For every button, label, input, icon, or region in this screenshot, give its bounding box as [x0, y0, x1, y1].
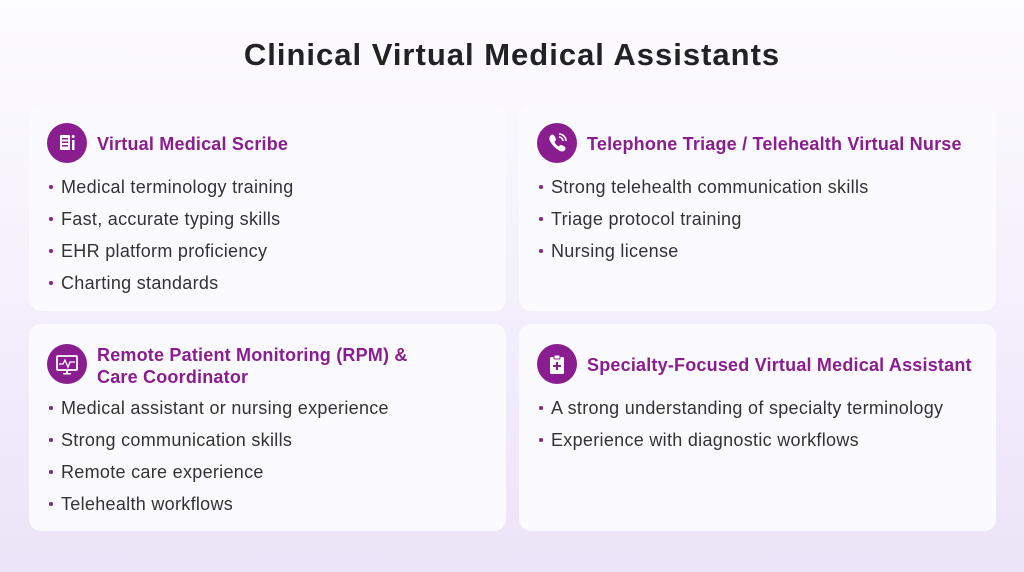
heading: Specialty-Focused Virtual Medical Assistant — [587, 355, 972, 375]
bullet list: Telehealth workflows — [61, 494, 233, 514]
heading: Remote Patient Monitoring (RPM) & — [97, 345, 408, 365]
bullet list: Strong telehealth communication skills — [551, 177, 869, 197]
panel: virtual medical scribe — [29, 104, 506, 311]
icon: clipboard — [537, 344, 577, 384]
bullet list: Nursing license — [551, 241, 679, 261]
bullet list — [49, 177, 294, 293]
bullet list — [539, 398, 943, 450]
panel: specialty-focused — [519, 324, 996, 531]
bullet list — [539, 177, 869, 261]
icon: monitor — [47, 344, 87, 384]
bullet list: Triage protocol training — [551, 209, 742, 229]
bullet list: A strong understanding of specialty terminology — [551, 398, 943, 418]
heading — [97, 345, 408, 387]
bullet list: Experience with diagnostic workflows — [551, 430, 859, 450]
bullet list: Charting standards — [61, 273, 218, 293]
title: Clinical Virtual Medical Assistants — [244, 37, 780, 72]
bullet list: EHR platform proficiency — [61, 241, 267, 261]
bullet list: Strong communication skills — [61, 430, 292, 450]
bullet list — [49, 398, 389, 514]
panel: remote patient monitoring — [29, 324, 506, 531]
heading: Telephone Triage / Telehealth Virtual Nurse — [587, 134, 962, 154]
panel: telephone triage — [519, 104, 996, 311]
icon: document — [47, 123, 87, 163]
bullet list: Medical terminology training — [61, 177, 294, 197]
heading: Virtual Medical Scribe — [97, 134, 288, 154]
bullet list: Remote care experience — [61, 462, 264, 482]
bullet list: Fast, accurate typing skills — [61, 209, 280, 229]
icon: phone — [537, 123, 577, 163]
heading: Care Coordinator — [97, 367, 248, 387]
bullet list: Medical assistant or nursing experience — [61, 398, 389, 418]
